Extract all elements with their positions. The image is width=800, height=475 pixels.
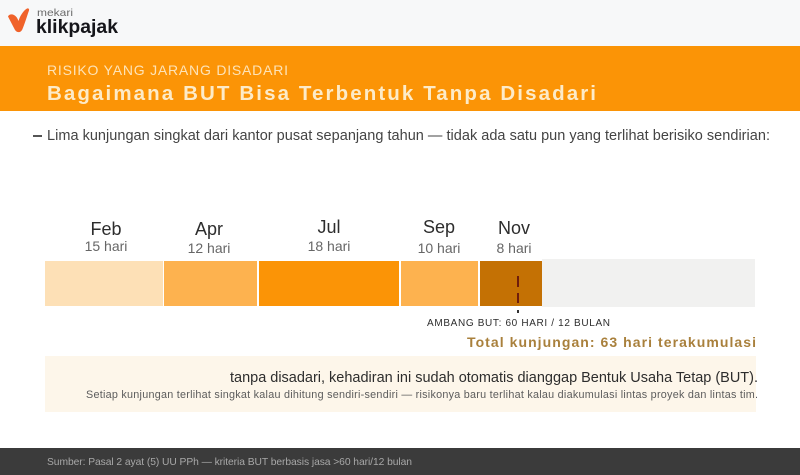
month labels: 8 hari (496, 240, 532, 256)
month labels: Sep (423, 217, 455, 237)
month labels: 12 hari (188, 240, 230, 256)
total label: Total kunjungan: 63 hari terakumulasi (467, 334, 756, 350)
callout: tanpa disadari, kehadiran ini sudah otomatis dianggap Bentuk Usaha Tetap (BUT). (230, 370, 758, 386)
intro text: Lima kunjungan singkat dari kantor pusat sepanjang tahun — tidak ada satu pun yang terlihat berisiko sendirian: (47, 128, 770, 144)
month labels: 10 hari (418, 240, 460, 256)
callout: Setiap kunjungan terlihat singkat kalau dihitung sendiri-sendiri — risikonya baru terlihat kalau diakumulasi lintas proyek dan lintas tim. (86, 389, 758, 401)
footer: Sumber: Pasal 2 ayat (5) UU PPh — kriteria BUT berbasis jasa >60 hari/12 bulan (47, 457, 412, 468)
month labels (85, 217, 532, 256)
header: logo bar (0, 0, 800, 46)
stacked bar: accumulated visit days (45, 259, 755, 307)
month labels: Feb (90, 219, 122, 239)
threshold label: AMBANG BUT: 60 HARI / 12 BULAN (427, 318, 610, 329)
month labels: Jul (317, 217, 341, 237)
title: Bagaimana BUT Bisa Terbentuk Tanpa Disadari (47, 82, 596, 105)
logo: mekari klikpajak (36, 7, 118, 38)
month labels: 15 hari (85, 238, 127, 254)
logo: mekari klikpajak: mekari (37, 7, 73, 19)
month labels: Nov (498, 218, 530, 238)
callout (45, 356, 758, 412)
month labels: 18 hari (308, 238, 350, 254)
logo: mekari klikpajak: klikpajak (36, 17, 118, 38)
threshold marker (517, 276, 519, 313)
icon: klikpajak check mark (8, 8, 29, 32)
month labels: Apr (195, 219, 223, 239)
footer (0, 448, 800, 475)
banner: title band (0, 46, 800, 111)
eyebrow text: RISIKO YANG JARANG DISADARI (47, 62, 288, 78)
